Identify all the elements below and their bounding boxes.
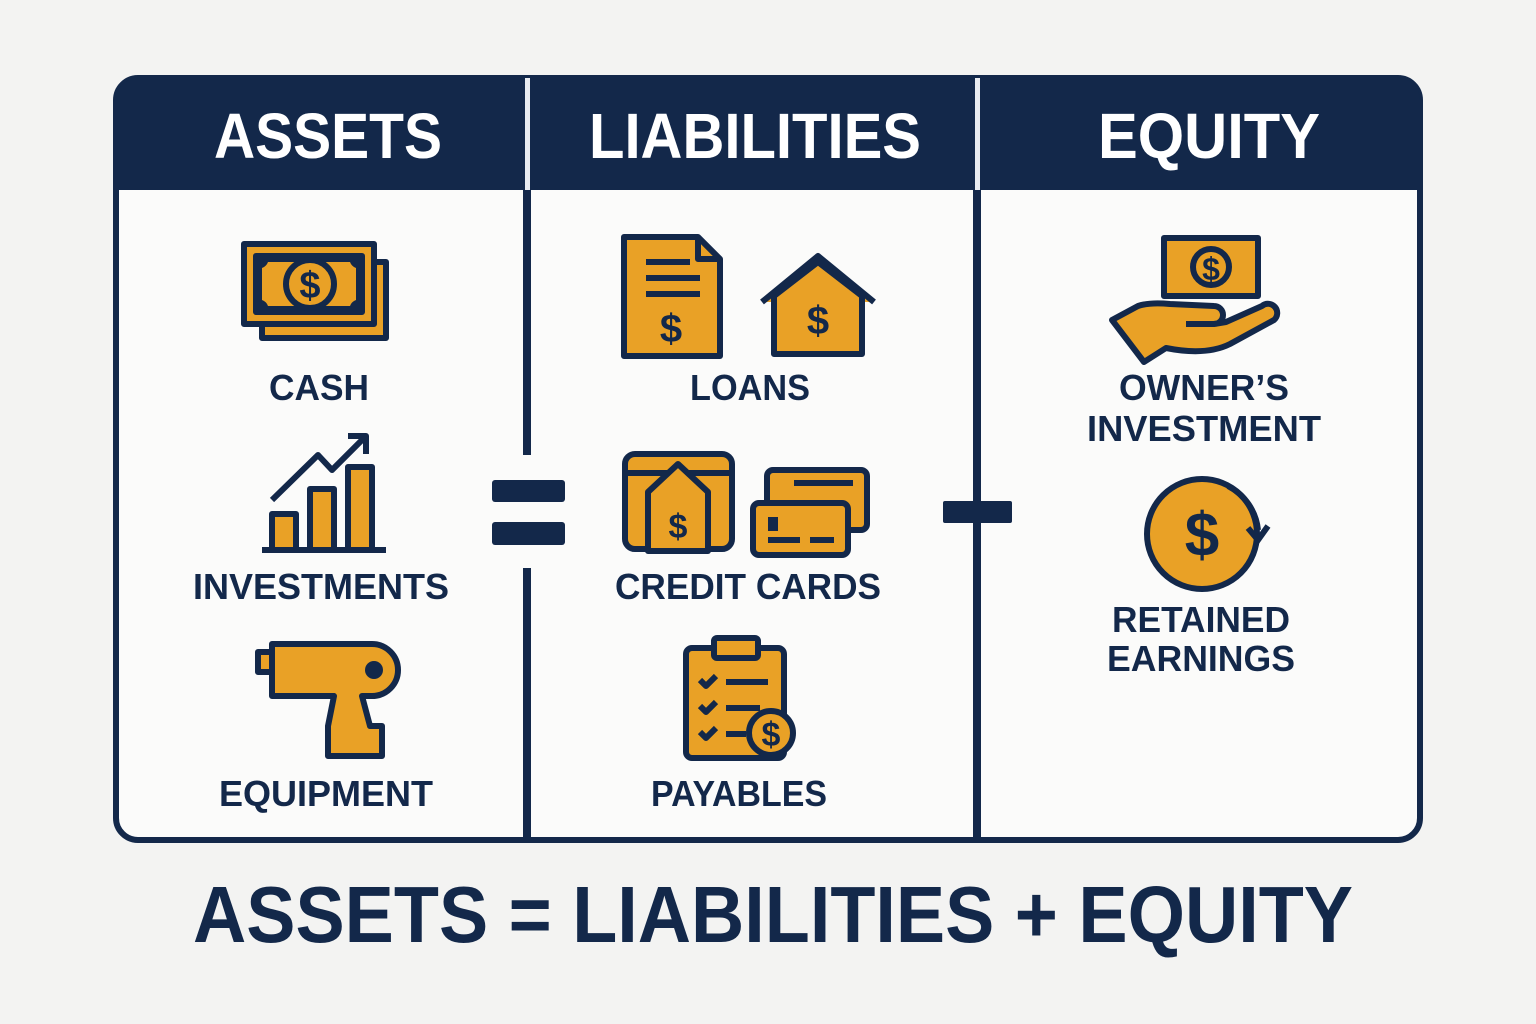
heading: equity: EQUITY <box>1098 100 1320 172</box>
equals sign <box>492 480 565 545</box>
label: retained earnings <box>1107 599 1295 679</box>
label: investments: INVESTMENTS <box>193 566 449 607</box>
label: retained earnings: EARNINGS <box>1107 638 1295 679</box>
label: owner's investment: OWNER’S <box>1119 367 1289 408</box>
icon: owner's investment: $ <box>1202 251 1220 287</box>
label: cash: CASH <box>269 367 369 408</box>
icon: investments <box>262 436 386 550</box>
icon: cash: $ <box>299 265 321 307</box>
icon: payables: $ <box>762 716 781 754</box>
icon: loans: $ <box>807 299 829 343</box>
label: owner's investment: INVESTMENT <box>1087 408 1321 449</box>
icon: credit cards <box>625 454 867 555</box>
icon: retained earnings: $ <box>1185 501 1219 570</box>
icon: payables <box>686 638 793 758</box>
label: credit cards: CREDIT CARDS <box>615 566 881 607</box>
label: loans: LOANS <box>690 367 810 408</box>
heading: liabilities: LIABILITIES <box>589 100 921 172</box>
label: owner's investment <box>1087 367 1321 449</box>
label: payables: PAYABLES <box>651 773 827 814</box>
icon: cash <box>244 244 386 338</box>
panel frame <box>116 78 1420 840</box>
heading: assets: ASSETS <box>214 100 442 172</box>
icon: equipment drill <box>258 644 398 756</box>
icon: retained earnings <box>1147 479 1268 589</box>
minus sign <box>943 501 1012 523</box>
formula: ASSETS = LIABILITIES + EQUITY <box>193 870 1353 959</box>
label: retained earnings: RETAINED <box>1112 599 1290 640</box>
icon: loans <box>624 237 874 356</box>
icon: owner's investment <box>1112 238 1277 362</box>
icon: credit cards: $ <box>669 508 688 546</box>
icon: loans: $ <box>660 307 682 351</box>
label: equipment: EQUIPMENT <box>219 773 433 814</box>
